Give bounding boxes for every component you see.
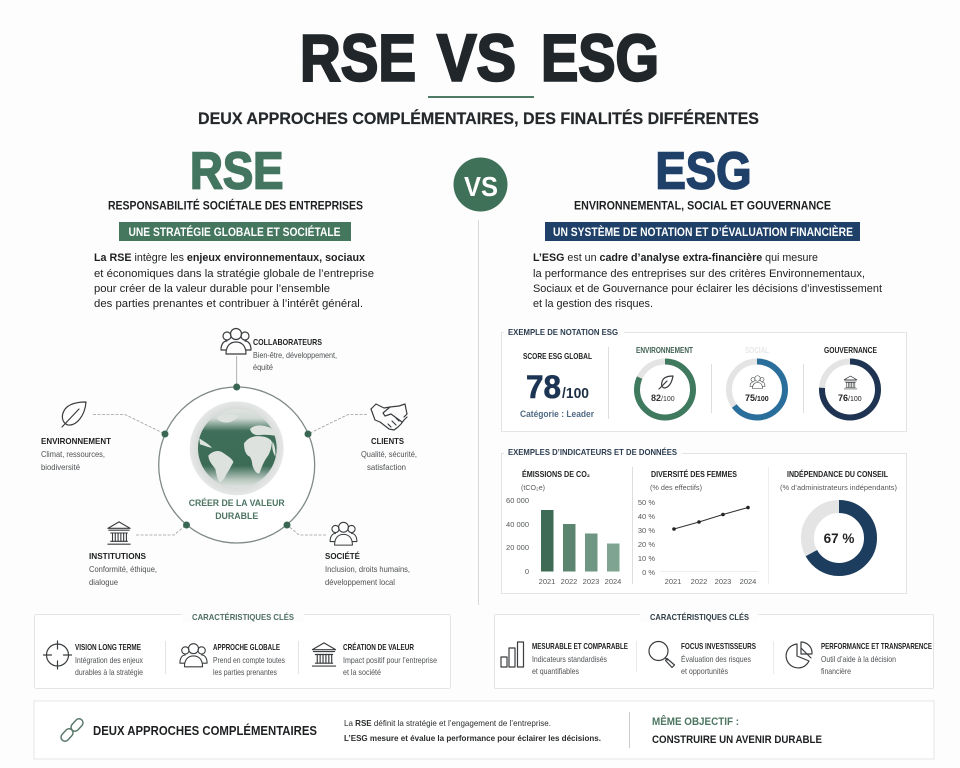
stakeholder: clients — [361, 436, 417, 472]
feature: focus — [681, 641, 756, 676]
gauge: gouvernance: GOUVERNANCE — [824, 346, 878, 355]
line chart: women diversity: 50 % — [638, 498, 655, 507]
feature: approche: Prend en compte toutes — [213, 655, 285, 665]
line chart: women diversity: DIVERSITÉ DES FEMMES — [651, 469, 737, 479]
bar chart: CO2 emissions: 20 000 — [506, 543, 529, 552]
gauge: gouvernance — [822, 346, 878, 418]
icon: temple — [312, 643, 336, 666]
ESG description: L’ESG est un cadre d’analyse extra-financière qui mesure — [533, 252, 818, 264]
ESG banner: UN SYSTÈME DE NOTATION ET D’ÉVALUATION FINANCIÈRE — [553, 226, 853, 239]
VS badge — [454, 158, 508, 212]
stakeholder: environnement — [41, 436, 112, 472]
panel: RSE header — [94, 142, 374, 310]
global score: /100 — [562, 385, 589, 402]
bar chart: CO2 emissions: 2024 — [605, 577, 621, 586]
globe — [190, 401, 284, 495]
bar chart: CO2 emissions: 0 — [525, 567, 529, 576]
stakeholder: société — [325, 551, 410, 587]
feature: mesurable: MESURABLE ET COMPARABLE — [532, 641, 628, 651]
RSE heading: RSE — [190, 142, 284, 200]
icon: link — [59, 717, 85, 743]
stakeholder: environnement: biodiversité — [41, 462, 80, 472]
stakeholder: environnement: Climat, ressources, — [41, 449, 105, 459]
panel: stakeholders diagram — [41, 328, 417, 587]
bar chart: CO2 emissions: 2021 — [539, 577, 555, 586]
feature: approche: APPROCHE GLOBALE — [213, 642, 280, 652]
feature: vision: durables à la stratégie — [75, 667, 143, 677]
global score: SCORE ESG GLOBAL — [523, 351, 592, 361]
icon: société — [330, 522, 357, 545]
global score: Catégorie : Leader — [520, 409, 594, 420]
line chart: women diversity: (% des effectifs) — [650, 483, 702, 492]
line chart: women diversity: 40 % — [638, 512, 655, 521]
icon: leaf — [62, 402, 86, 427]
donut chart: board independence: (% d’administrateurs indépendants) — [780, 483, 897, 492]
stakeholder: environnement: ENVIRONNEMENT — [41, 436, 112, 446]
icon: institutions — [108, 522, 130, 544]
rating heading: EXEMPLE DE NOTATION ESG — [508, 327, 618, 337]
feature: performance: Outil d’aide à la décision — [821, 654, 896, 664]
RSE full name: RESPONSABILITÉ SOCIÉTALE DES ENTREPRISES — [108, 200, 363, 212]
bar chart: CO2 emissions: 2022 — [561, 577, 577, 586]
line chart: women diversity: 2023 — [715, 577, 731, 586]
panel: indicators — [502, 445, 906, 594]
shared objective — [652, 715, 822, 746]
title: ESG — [541, 20, 659, 94]
gauge: environnement: ENVIRONNEMENT — [636, 346, 693, 355]
feature: mesurable: Indicateurs standardisés — [532, 654, 607, 664]
feature: création — [343, 642, 437, 677]
line chart: women diversity: 2022 — [691, 577, 707, 586]
bar chart: CO2 emissions: (tCO₂e) — [521, 483, 545, 492]
RSE description: La RSE intègre les enjeux environnementaux, sociaux — [94, 252, 366, 264]
gauge: gouvernance: 76/100 — [838, 393, 862, 403]
feature: mesurable — [532, 641, 628, 676]
bar chart: CO2 emissions: 2023 — [583, 577, 599, 586]
gauge: environnement — [636, 346, 693, 418]
feature: performance — [821, 641, 932, 676]
donut chart: board independence: 67 % — [824, 531, 854, 546]
ESG description — [533, 252, 882, 310]
ESG description: Sociaux et de Gouvernance pour éclairer les décisions d’investissement — [533, 283, 882, 295]
central caption: DURABLE — [215, 511, 258, 522]
global score — [520, 351, 594, 420]
RSE banner: UNE STRATÉGIE GLOBALE ET SOCIÉTALE — [128, 226, 341, 239]
title — [300, 20, 659, 94]
gauge: environnement: 82/100 — [651, 393, 675, 403]
feature: vision — [75, 642, 144, 677]
conclusion text: La RSE définit la stratégie et l’engagement de l’entreprise. — [344, 718, 551, 728]
stakeholder: institutions: INSTITUTIONS — [89, 551, 146, 561]
feature: création: CRÉATION DE VALEUR — [343, 642, 414, 652]
stakeholder: clients: CLIENTS — [371, 436, 404, 446]
feature: approche — [213, 642, 285, 677]
panel: ESG header — [533, 142, 882, 310]
title: VS — [437, 20, 516, 94]
stakeholder: clients: satisfaction — [367, 462, 406, 472]
line chart: women diversity: 2021 — [665, 577, 681, 586]
feature: focus: Évaluation des risques — [681, 654, 751, 664]
nodes — [162, 384, 312, 528]
ESG description: et la gestion des risques. — [533, 298, 653, 310]
ESG description: la performance des entreprises sur des critères Environnementaux, — [533, 268, 865, 280]
stakeholder: collaborateurs: équité — [253, 362, 273, 372]
feature: approche: les parties prenantes — [213, 667, 277, 677]
gauge: social: SOCIAL — [745, 346, 769, 355]
line chart: women diversity — [638, 469, 758, 586]
icon: target — [44, 641, 72, 669]
stakeholder: institutions — [89, 551, 157, 587]
feature: vision: Intégration des enjeux — [75, 655, 144, 665]
feature: focus: et opportunités — [681, 666, 728, 676]
icon: pie chart — [786, 642, 812, 668]
icon: collaborateurs — [221, 328, 251, 354]
panel: RSE key characteristics — [34, 608, 450, 688]
icon: magnifier — [649, 642, 674, 668]
conclusion heading: DEUX APPROCHES COMPLÉMENTAIRES — [93, 723, 317, 738]
stakeholder: institutions: Conformité, éthique, — [89, 564, 157, 574]
RSE characteristics heading: CARACTÉRISTIQUES CLÉS — [192, 612, 294, 622]
central divider — [478, 220, 480, 605]
connectors — [93, 356, 367, 535]
RSE description: pour créer de la valeur durable pour l’ensemble — [94, 283, 330, 295]
stakeholder: collaborateurs — [253, 337, 337, 372]
conclusion text — [344, 718, 601, 743]
feature: vision: VISION LONG TERME — [75, 642, 141, 652]
stakeholder: clients: Qualité, sécurité, — [361, 449, 417, 459]
feature: performance: financière — [821, 666, 851, 676]
central caption: CRÉER DE LA VALEUR — [189, 498, 285, 509]
feature: création: et la société — [343, 667, 381, 677]
icon: bars — [501, 642, 524, 667]
title: RSE — [300, 20, 416, 94]
gauge: social — [729, 346, 785, 418]
indicators heading: EXEMPLES D’INDICATEURS ET DE DONNÉES — [508, 447, 677, 457]
icon: people — [180, 644, 207, 667]
RSE banner — [119, 222, 351, 241]
panel: conclusion — [34, 701, 934, 759]
stakeholder: collaborateurs: COLLABORATEURS — [253, 337, 322, 347]
gauge: social: 75/100 — [745, 393, 769, 403]
central caption — [189, 498, 285, 522]
VS badge: VS — [464, 171, 498, 202]
bar chart: CO2 emissions — [506, 469, 621, 586]
line chart: women diversity: 20 % — [638, 540, 655, 549]
line chart: women diversity: 0 % — [642, 568, 655, 577]
bar chart: CO2 emissions: ÉMISSIONS DE CO₂ — [522, 469, 590, 479]
stakeholder: société: SOCIÉTÉ — [325, 551, 360, 561]
icon: handshake — [371, 404, 407, 430]
global score: 78 — [526, 369, 561, 405]
line chart: women diversity: 2024 — [740, 577, 756, 586]
bar chart: CO2 emissions: 60 000 — [506, 496, 529, 505]
donut chart: board independence: INDÉPENDANCE DU CONSEIL — [787, 469, 888, 479]
feature: mesurable: et quantifiables — [532, 666, 579, 676]
RSE description: des parties prenantes et contribuer à l’intérêt général. — [94, 298, 363, 310]
ESG heading: ESG — [656, 142, 752, 200]
donut chart: board independence — [780, 469, 897, 570]
panel: ESG rating — [502, 326, 906, 432]
line chart: women diversity: 30 % — [638, 526, 655, 535]
shared objective: CONSTRUIRE UN AVENIR DURABLE — [652, 734, 822, 746]
feature: focus: FOCUS INVESTISSEURS — [681, 641, 756, 651]
central circle — [159, 387, 315, 543]
stakeholder: société: Inclusion, droits humains, — [325, 564, 410, 574]
ESG characteristics heading: CARACTÉRISTIQUES CLÉS — [650, 612, 749, 622]
subtitle: DEUX APPROCHES COMPLÉMENTAIRES, DES FINALITÉS DIFFÉRENTES — [198, 109, 759, 128]
shared objective: MÊME OBJECTIF : — [652, 715, 739, 728]
RSE description — [94, 252, 374, 310]
stakeholder: collaborateurs: Bien-être, développement, — [253, 350, 337, 360]
RSE description: et économiques dans la stratégie globale de l’entreprise — [94, 268, 374, 280]
panel: ESG key characteristics — [494, 608, 934, 688]
bar chart: CO2 emissions: 40 000 — [506, 520, 529, 529]
ESG full name: ENVIRONNEMENTAL, SOCIAL ET GOUVERNANCE — [574, 200, 831, 212]
feature: création: Impact positif pour l’entreprise — [343, 655, 437, 665]
stakeholder: institutions: dialogue — [89, 577, 118, 587]
line chart: women diversity: 10 % — [638, 554, 655, 563]
ESG banner — [545, 222, 860, 241]
stakeholder: société: développement local — [325, 577, 395, 587]
conclusion text: L’ESG mesure et évalue la performance pour éclairer les décisions. — [344, 733, 601, 743]
